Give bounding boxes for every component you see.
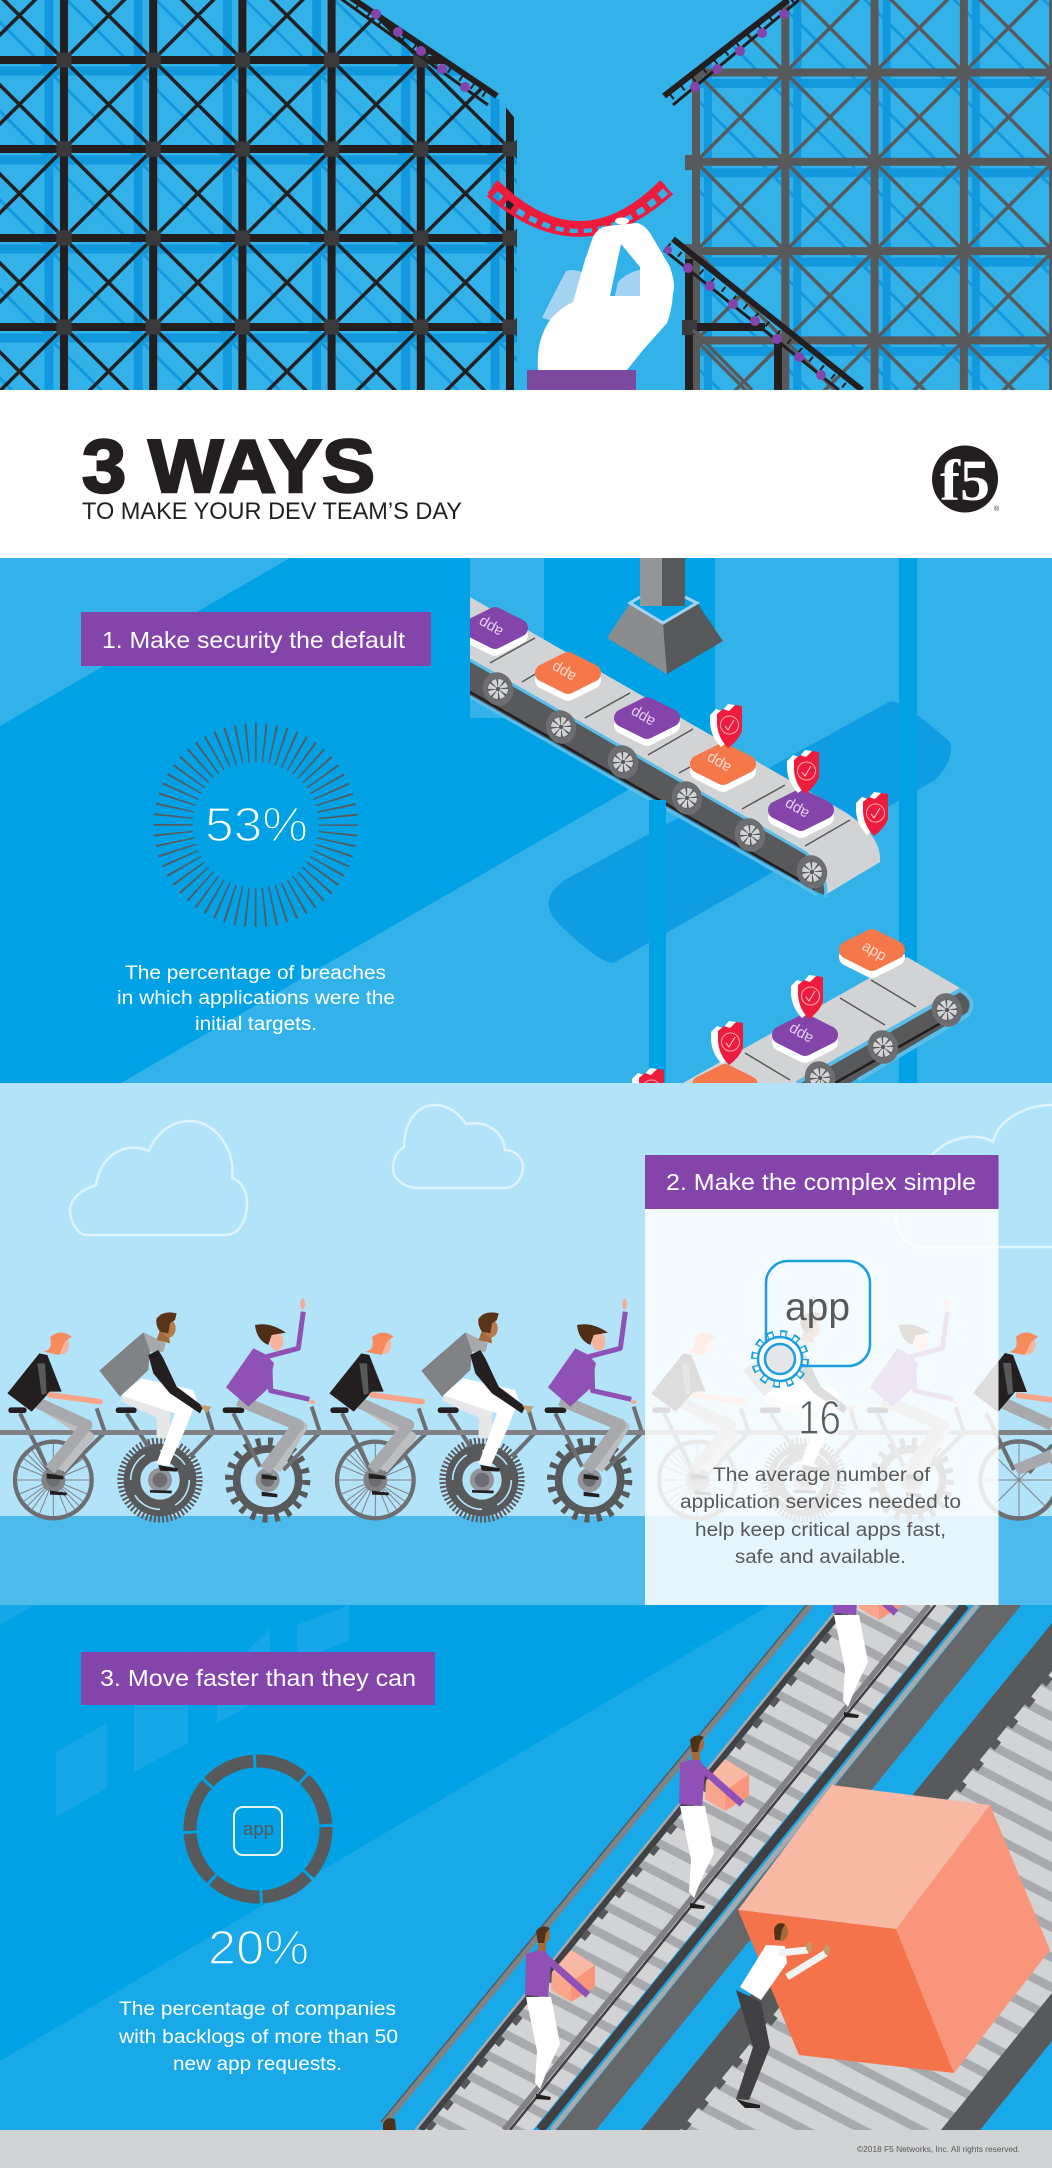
- hand: [527, 218, 674, 390]
- info panel: [645, 1155, 998, 1605]
- escalators: [381, 1603, 1052, 2130]
- people carrying boxes: [383, 1545, 903, 2130]
- description: in which applications were the: [117, 988, 395, 1009]
- right coaster lattice: [690, 0, 1052, 390]
- copyright: ©2018 F5 Networks, Inc. All rights reserved.: [857, 2144, 1020, 2154]
- ring with app icon: [190, 1761, 326, 1897]
- heading bar: 3. Move faster than they can: [100, 1665, 416, 1691]
- heading bar: 2. Make the complex simple: [666, 1169, 976, 1195]
- lower right black frame: [682, 155, 782, 390]
- security shields: [710, 704, 888, 836]
- F5 logo: f5: [940, 448, 990, 513]
- section 2: make the complex simple: [0, 1083, 1052, 1605]
- app tiles: app: [628, 703, 658, 731]
- app tiles: app: [476, 613, 506, 641]
- stat 16: 16: [798, 1392, 841, 1445]
- ring with app icon: app: [243, 1819, 274, 1839]
- section 3: move faster than they can: [0, 1605, 1052, 2130]
- heading bar: [81, 612, 431, 666]
- belt shadow: [549, 702, 951, 963]
- app tiles: app: [549, 658, 579, 686]
- heading bar: 1. Make security the default: [102, 627, 406, 653]
- description: with backlogs of more than 50: [118, 2027, 398, 2048]
- description: The average number of: [713, 1465, 931, 1486]
- description: safe and available.: [735, 1547, 906, 1568]
- description: help keep critical apps fast,: [695, 1520, 946, 1541]
- red track piece: [488, 183, 672, 235]
- description: new app requests.: [173, 2054, 342, 2075]
- F5 logo: [932, 446, 1000, 513]
- dark vertical strips: [649, 558, 917, 1083]
- description: [118, 1999, 398, 2075]
- background shapes: [0, 558, 1052, 1083]
- man pushing cube: [736, 1923, 830, 2108]
- app icon with gear: app: [785, 1286, 850, 1329]
- description: The percentage of breaches: [125, 963, 386, 984]
- faded background shapes: [0, 1605, 349, 1817]
- section 1: make security the default: [0, 558, 1052, 1112]
- pedestal: [607, 558, 723, 674]
- description: The percentage of companies: [119, 1999, 396, 2020]
- description: initial targets.: [195, 1014, 317, 1035]
- lower conveyor belt: [632, 937, 972, 1112]
- heading bar: [81, 1652, 435, 1705]
- description: [680, 1465, 961, 1568]
- sunburst dial: [173, 742, 338, 908]
- F5 logo: ®: [994, 505, 1000, 513]
- coaster rails with purple lights: [340, 0, 862, 390]
- clouds: [70, 1105, 1052, 1247]
- subheading: TO MAKE YOUR DEV TEAM’S DAY: [82, 498, 462, 525]
- title band: [0, 390, 1052, 558]
- app icon with gear: [755, 1261, 870, 1384]
- heading bar: [645, 1155, 998, 1209]
- app tiles: [471, 613, 825, 829]
- lower conveyor belt: app: [859, 937, 889, 965]
- upper conveyor belt: [470, 597, 888, 897]
- app tiles: app: [782, 795, 812, 823]
- description: [117, 963, 395, 1035]
- main heading: 3 WAYS: [82, 424, 375, 508]
- stat 20%: 20%: [208, 1922, 309, 1975]
- large orange cube: [738, 1785, 1050, 2073]
- app tiles: app: [704, 749, 734, 777]
- footer: [0, 2130, 1052, 2168]
- hero illustration: roller coaster: [0, 0, 1052, 390]
- lower conveyor belt: app: [786, 1020, 816, 1048]
- stat 53%: 53%: [205, 799, 308, 852]
- cyclists: [0, 1299, 1052, 1519]
- left coaster lattice: [0, 0, 520, 390]
- description: application services needed to: [680, 1492, 961, 1513]
